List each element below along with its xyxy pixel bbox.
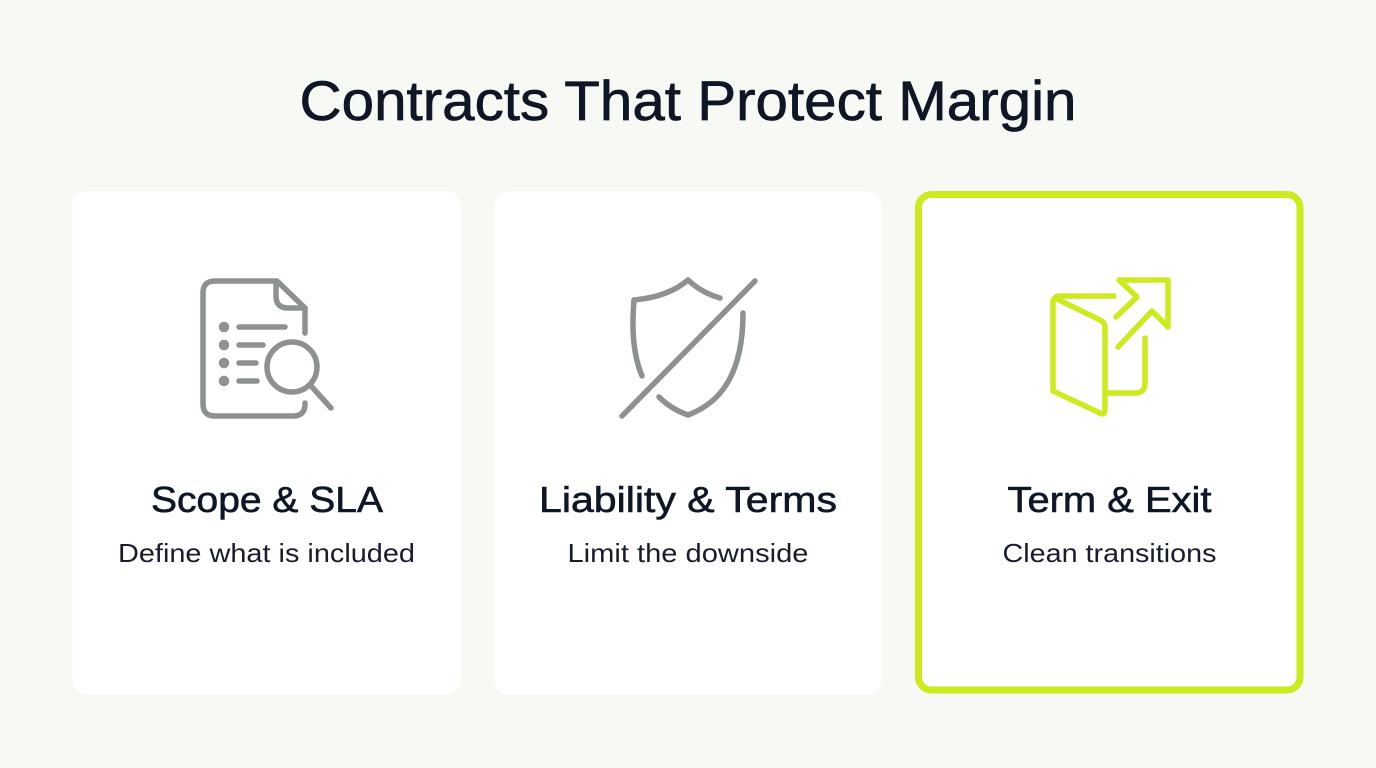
title: Contracts That Protect Margin: [300, 69, 1076, 132]
icon: open door with exit arrow: [1053, 280, 1168, 414]
icon: crossed-out shield: [622, 280, 755, 416]
heading: scope and SLA: Scope & SLA: [151, 479, 383, 520]
text: term description: Clean transitions: [1002, 538, 1216, 568]
heading: term and exit: Term & Exit: [1008, 479, 1212, 520]
text: scope description: Define what is included: [118, 538, 415, 568]
panel: liability and terms: [494, 191, 882, 694]
heading: liability and terms: Liability & Terms: [539, 479, 837, 520]
text: liability description: Limit the downside: [568, 538, 808, 568]
icon: document with magnifier: [203, 281, 331, 416]
panel: term and exit: [918, 194, 1300, 690]
panel: scope and SLA: [72, 191, 461, 694]
